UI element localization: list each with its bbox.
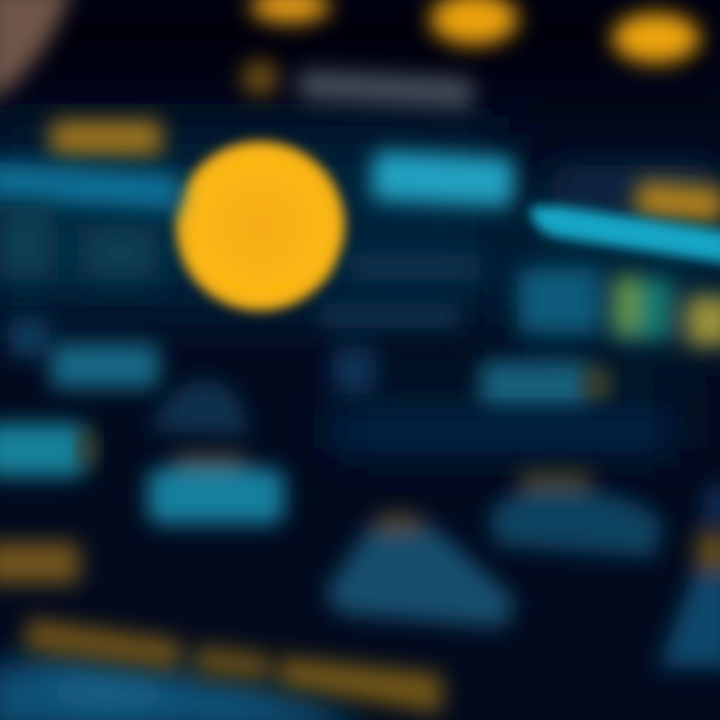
center lower: teal label with orange cap [148,454,284,524]
bottom heading: orange title [24,618,442,714]
right panel: coloured chart blocks [518,268,720,346]
right lower: faded label with orange cap [488,472,664,558]
center cyan label [371,150,515,208]
right edge: orange label and teal bar [658,478,720,668]
large sun circle [175,141,345,311]
center triangle shape with orange cap [324,514,516,628]
right panel: orange label [635,180,720,224]
left middle: teal label [50,343,160,389]
top heading: icon and title [242,60,475,109]
bottom block: teal data area [0,654,370,720]
left lower: orange accent [80,432,96,464]
center small label [150,380,250,436]
right middle: teal label [480,361,590,409]
right cyan band [530,206,720,264]
left lower: teal label [0,423,86,477]
corner: skin-toned object [0,0,72,104]
left panel: faded chart blocks [0,205,160,280]
right panel: dark outline [550,165,720,215]
left heading: orange label [50,120,162,156]
right middle: orange accent [585,368,609,400]
top row: orange ovals [250,0,700,63]
center faded text lines [320,254,480,328]
left cyan band [0,161,180,212]
left middle: small icon dot [8,318,50,358]
heading title [297,69,475,109]
center long faded bar [330,414,670,448]
left lower: orange label [0,542,80,584]
center small icon [332,346,376,394]
icon: heading dot [242,60,278,96]
background glow panels [0,0,720,450]
